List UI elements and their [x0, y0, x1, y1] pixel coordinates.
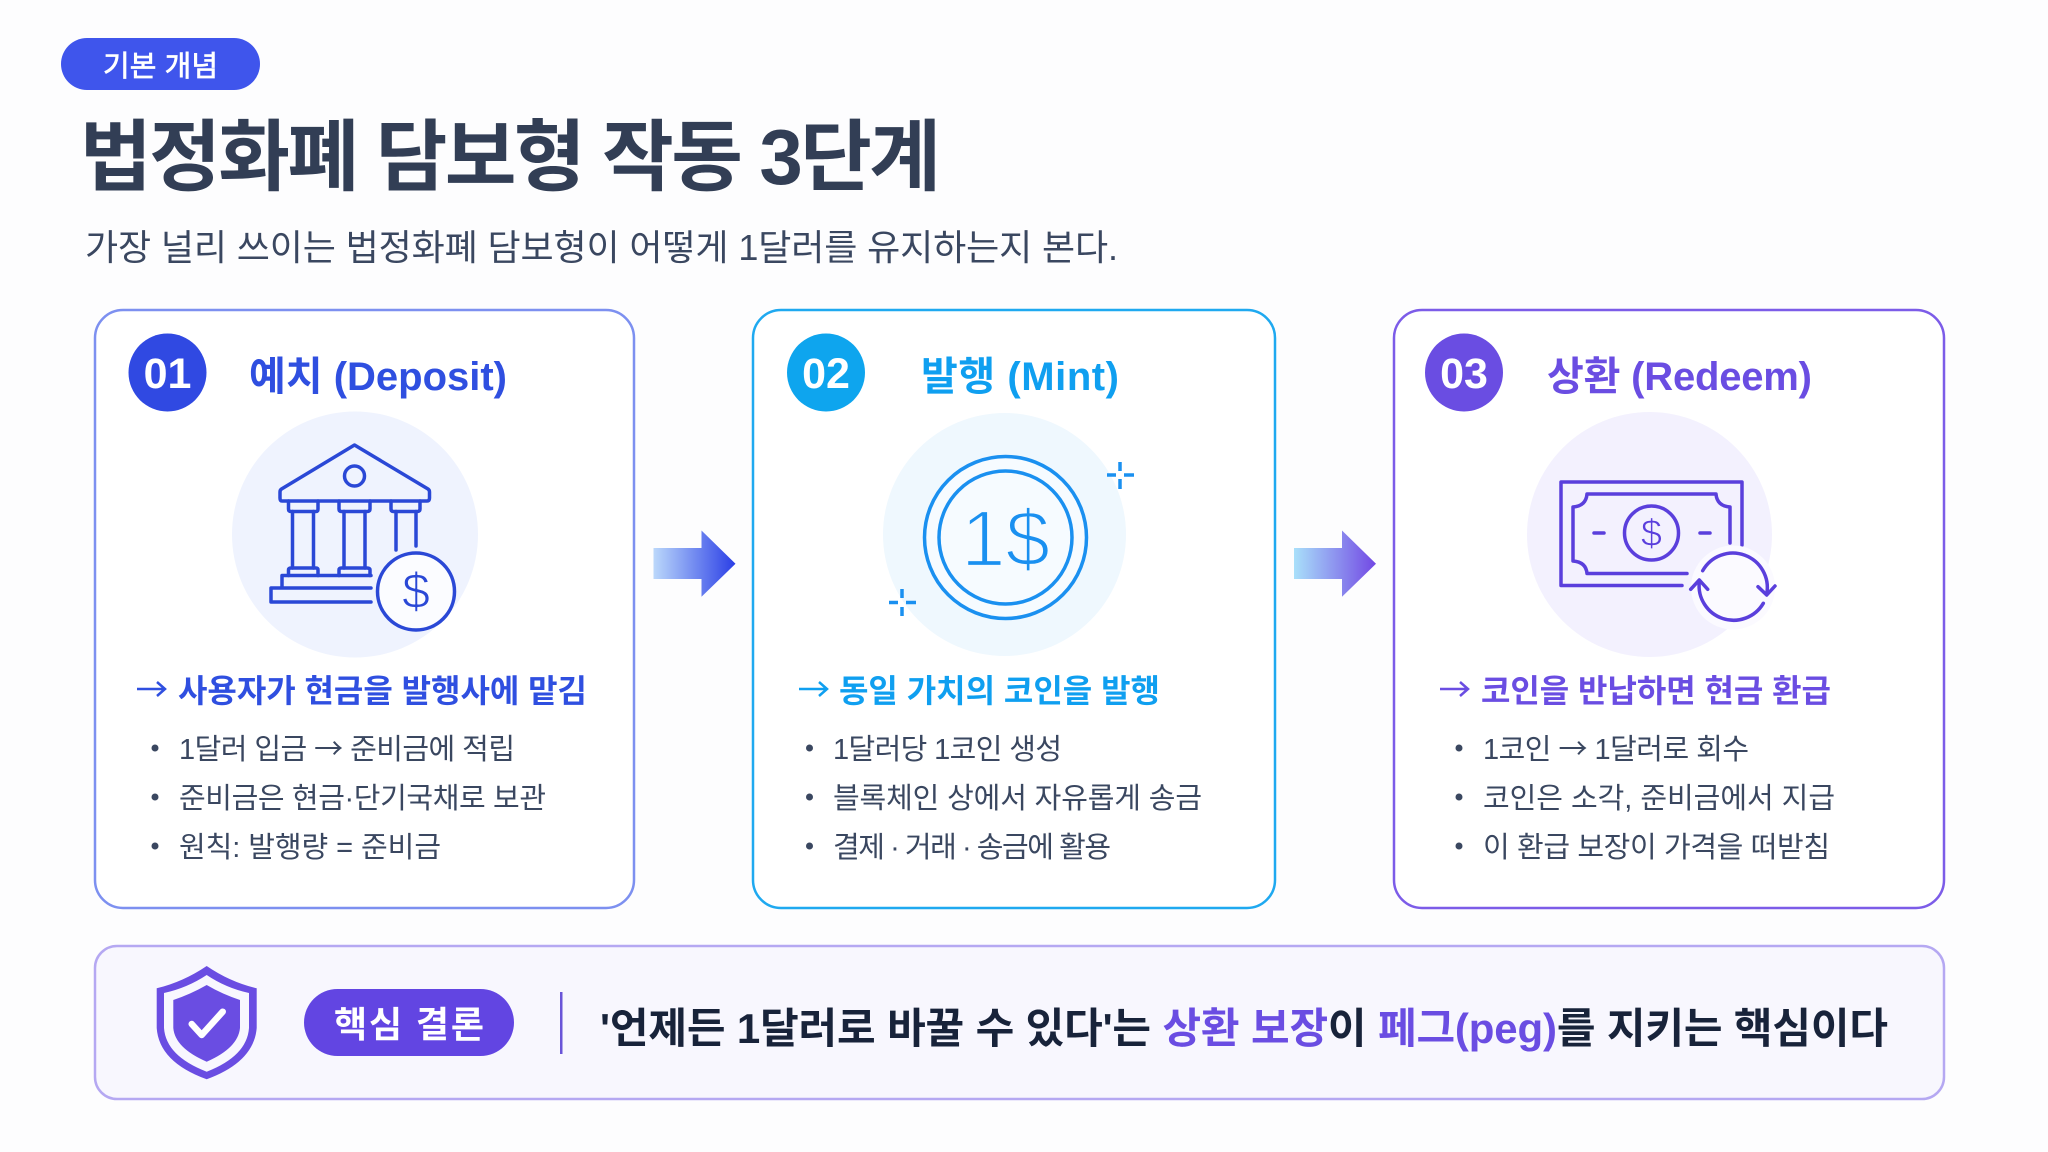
step number 02: [787, 334, 865, 412]
heading: 예치: 예치 (Deposit): [249, 355, 507, 399]
bullet list: 1달러당 1코인 생성: [833, 734, 1062, 766]
badge: 기본 개념: 기본 개념: [103, 51, 218, 83]
panel: key conclusion: [95, 946, 1944, 1099]
icon: banknote with exchange arrows: $: [1641, 513, 1662, 555]
step number 03: 03: [1440, 350, 1488, 398]
icon: banknote with exchange arrows: [1527, 412, 1775, 657]
step number 01: [128, 334, 206, 412]
panel: step 03 redeem: [1394, 310, 1944, 908]
bullet list: 블록체인 상에서 자유롭게 송금: [833, 783, 1202, 815]
title: 법정화폐 담보형 작동 3단계: [80, 113, 941, 201]
key point: 사용자가 현금을 발행사에 맡김: [178, 673, 587, 709]
bullet list: [152, 726, 546, 864]
subtitle: 가장 널리 쓰이는 법정화폐 담보형이 어떻게 1달러를 유지하는지 본다.: [85, 227, 1118, 268]
badge: 기본 개념: [61, 38, 260, 90]
step number 03: [1425, 334, 1503, 412]
divider: [560, 992, 562, 1054]
conclusion text: '언제든 1달러로 바꿀 수 있다'는 상환 보장이 페그(peg)를 지키는 핵심이다: [600, 1005, 1888, 1052]
bullet list: 1코인 → 1달러로 회수: [1483, 726, 1749, 768]
key point: 코인을 반납하면 현금 환급: [1481, 673, 1831, 709]
bullet list: [806, 734, 1202, 864]
heading: 상환: 상환 (Redeem): [1547, 355, 1812, 399]
bullet list: 이 환급 보장이 가격을 떠받침: [1483, 832, 1830, 864]
icon: 1 dollar coin: [883, 413, 1134, 656]
bullet list: 준비금은 현금·단기국채로 보관: [179, 782, 546, 815]
icon: bank with dollar coin: $: [402, 563, 430, 619]
arrow: step 1 to 2: [654, 530, 736, 597]
icon: 1 dollar coin: 1$: [961, 494, 1050, 583]
badge: 핵심 결론: 핵심 결론: [334, 1004, 484, 1045]
key point: 동일 가치의 코인을 발행: [839, 673, 1160, 709]
bullet list: 코인은 소각, 준비금에서 지급: [1483, 783, 1835, 815]
bullet list: [1456, 726, 1835, 864]
icon: shield with check: [157, 966, 257, 1079]
badge: 핵심 결론: [304, 989, 514, 1056]
heading: 발행: 발행 (Mint): [921, 355, 1119, 399]
step number 02: 02: [802, 350, 850, 398]
bullet list: 1달러 입금 → 준비금에 적립: [179, 726, 515, 768]
panel: step 02 mint: [753, 310, 1275, 908]
panel: step 01 deposit: [95, 310, 634, 908]
arrow: step 2 to 3: [1294, 530, 1376, 597]
bullet list: 결제 · 거래 · 송금에 활용: [833, 831, 1111, 864]
step number 01: 01: [144, 350, 191, 398]
bullet list: 원칙: 발행량 = 준비금: [179, 831, 441, 864]
icon: bank with dollar coin: [232, 412, 478, 658]
